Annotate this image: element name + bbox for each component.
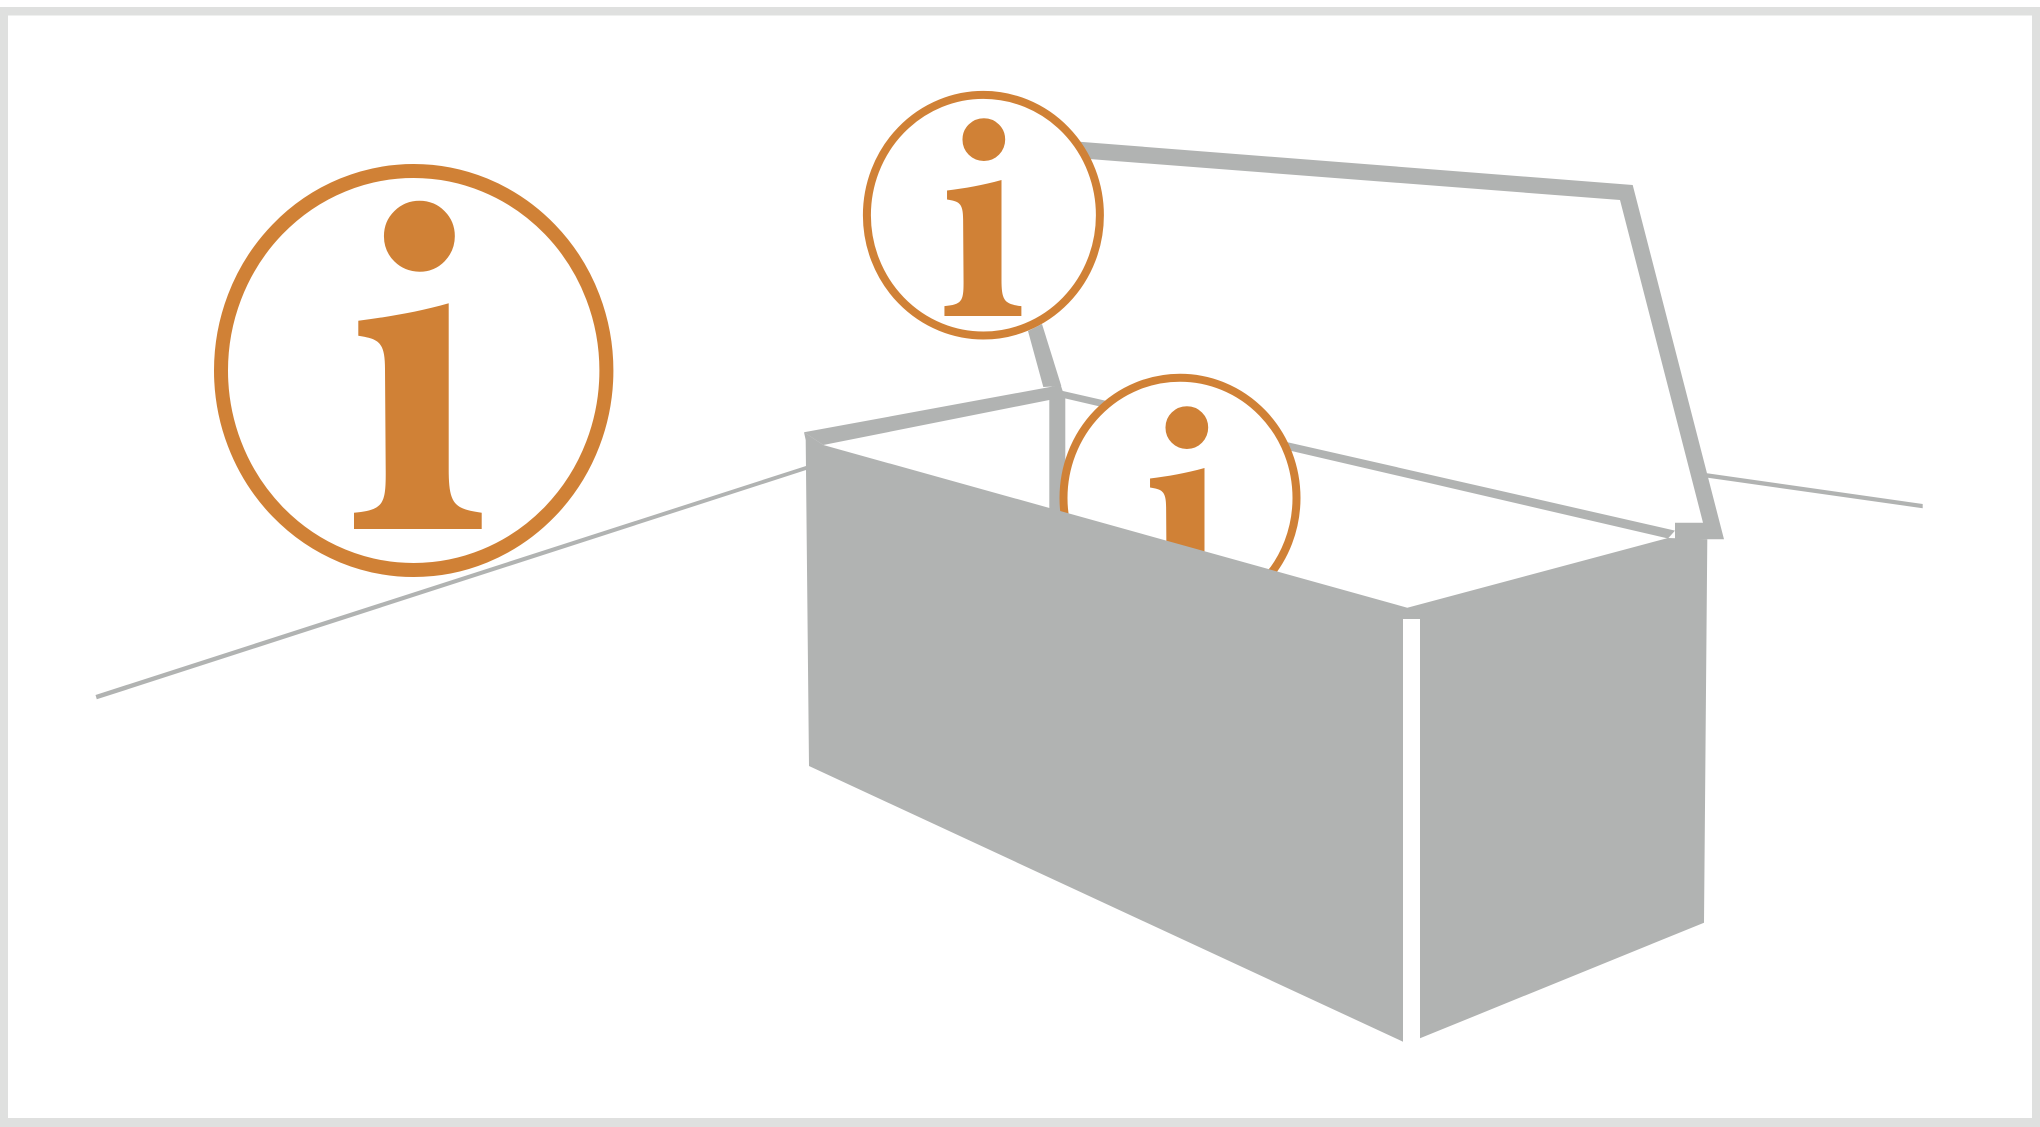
box body bbox=[804, 385, 1707, 1042]
box inner corner post bbox=[1049, 392, 1065, 572]
box back edge bbox=[1052, 388, 1675, 538]
icon: info circle inside box: i bbox=[1146, 350, 1226, 666]
lid support strut bbox=[1028, 324, 1061, 387]
icon: info circle above box bbox=[867, 62, 1100, 378]
box rim bbox=[804, 385, 1065, 445]
icon: info circle inside box bbox=[1064, 350, 1296, 666]
icon: large info circle: i bbox=[352, 109, 484, 632]
box front faces bbox=[804, 432, 1707, 1042]
ground line left bbox=[96, 466, 806, 699]
ground line right bbox=[1707, 473, 1923, 508]
open lid frame bbox=[1070, 141, 1724, 539]
icon: large info circle bbox=[221, 109, 606, 632]
icon: info circle above box: i bbox=[943, 62, 1023, 378]
